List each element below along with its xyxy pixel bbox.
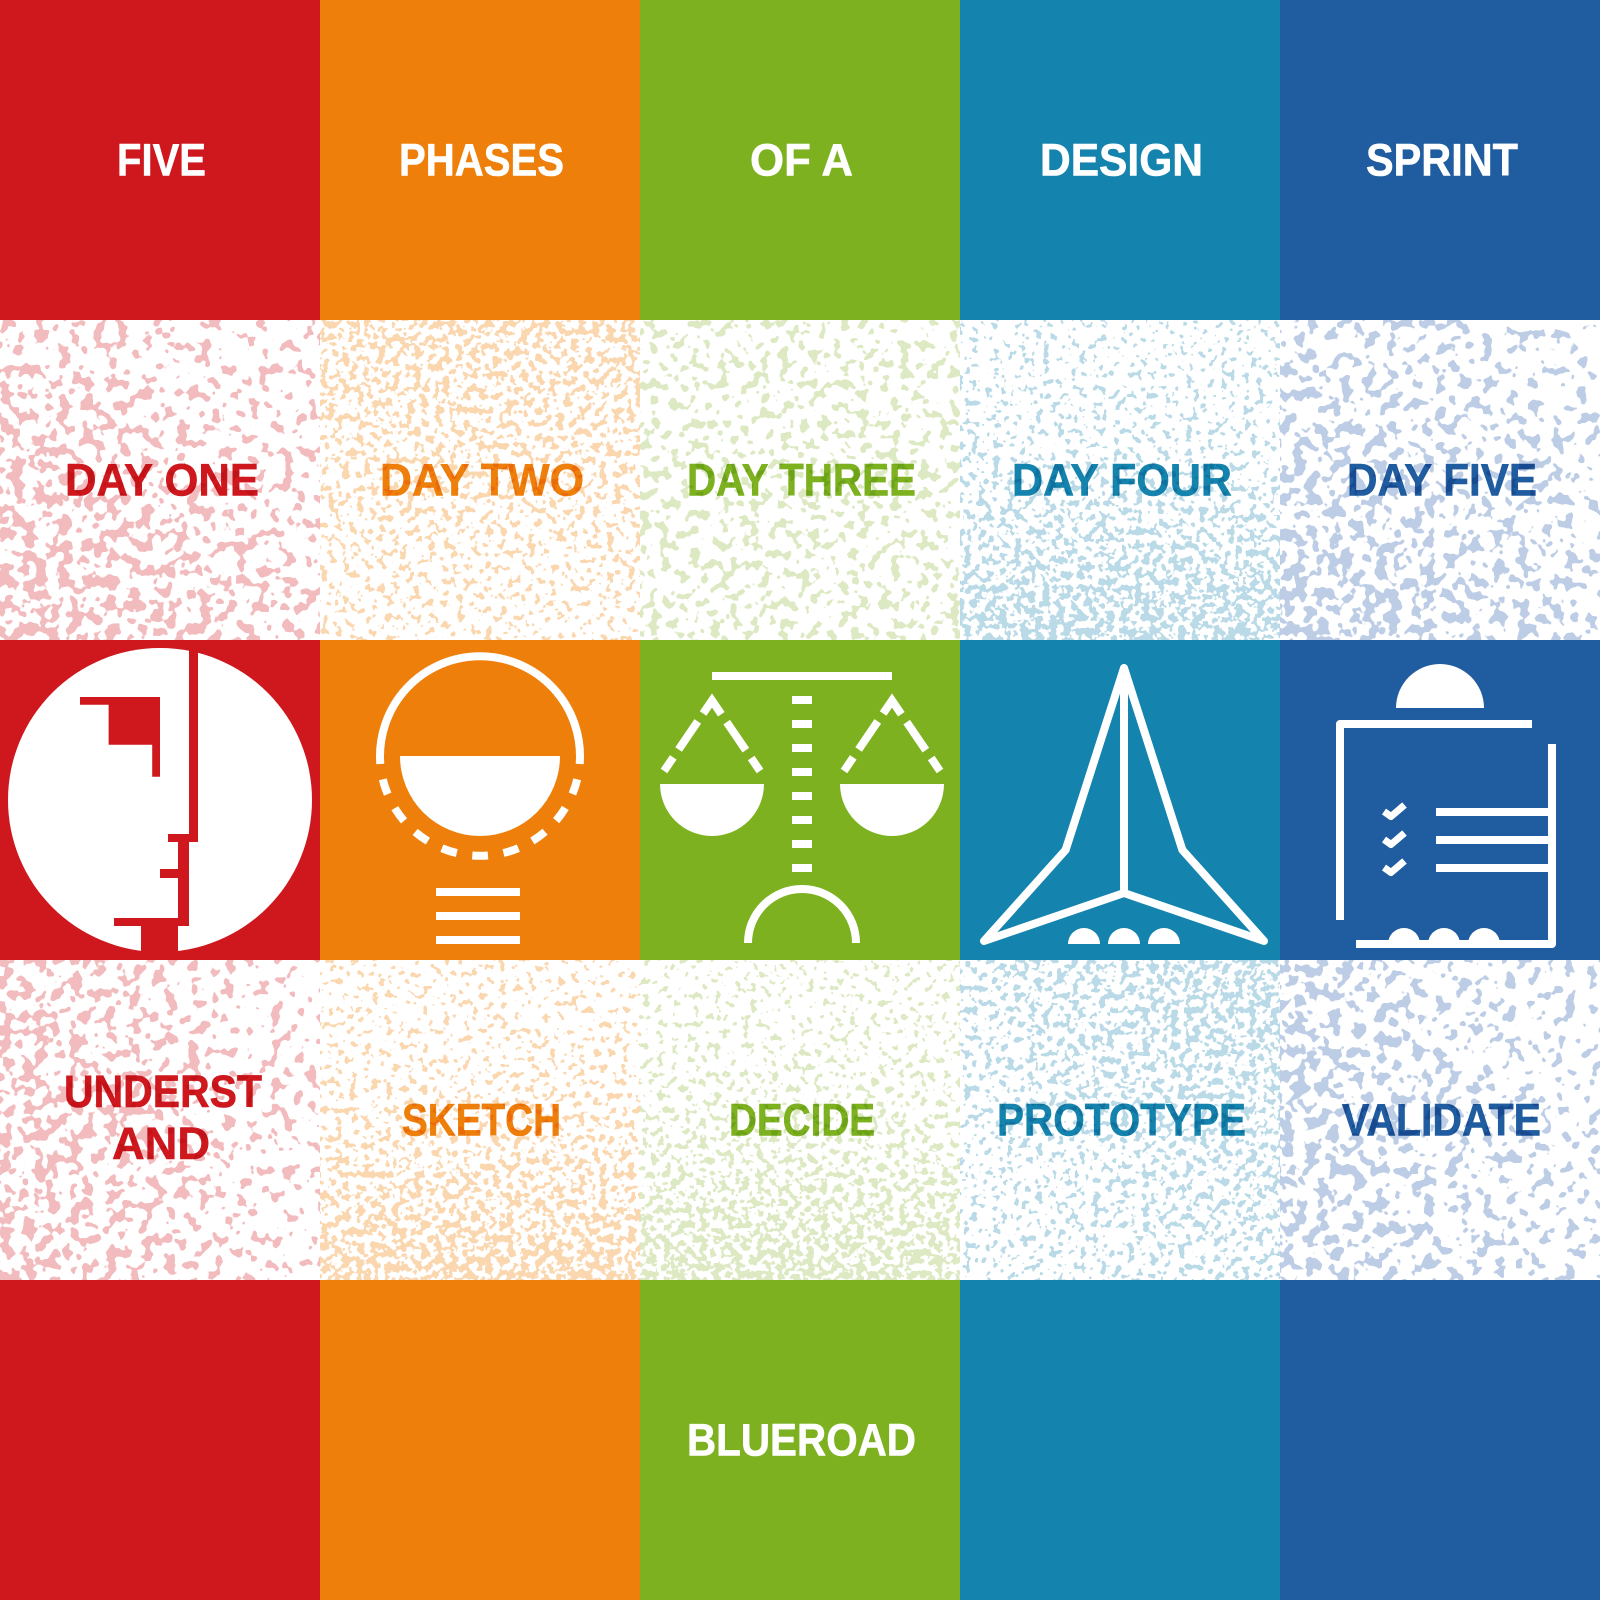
icon: light bulb on orange (320, 640, 640, 960)
footer tile: blue (1280, 1280, 1600, 1600)
title tile: DESIGN (960, 0, 1280, 320)
day labels row (0, 320, 1600, 640)
icon: bauhaus profile head on red (0, 640, 320, 960)
footer tile: red (0, 1280, 320, 1600)
phase tile: PROTOTYPE: PROTOTYPE (997, 1094, 1246, 1146)
icons row (0, 640, 1600, 960)
phase tile: DECIDE: DECIDE (729, 1094, 875, 1146)
icon: folded paper plane on teal (960, 640, 1280, 960)
day tile: DAY FIVE (1280, 320, 1600, 640)
title tile: FIVE: FIVE (117, 134, 206, 186)
title tile: FIVE (0, 0, 320, 320)
phase labels row (0, 960, 1600, 1280)
title tile: DESIGN: DESIGN (1040, 134, 1203, 186)
footer tile: BLUEROAD credit: BLUEROAD (687, 1414, 916, 1466)
footer tile: teal (960, 1280, 1280, 1600)
title tile: SPRINT (1280, 0, 1600, 320)
title tile: PHASES (320, 0, 640, 320)
phase tile: DECIDE (640, 960, 960, 1280)
phase tile: PROTOTYPE (960, 960, 1280, 1280)
title tile: PHASES: PHASES (399, 134, 564, 186)
phase tile: SKETCH (320, 960, 640, 1280)
phase tile: VALIDATE: VALIDATE (1342, 1094, 1541, 1146)
title tile: OF A: OF A (750, 134, 853, 186)
title tile: OF A (640, 0, 960, 320)
icon: balance scales on green (640, 640, 960, 960)
title row (0, 0, 1600, 320)
phase tile: SKETCH: SKETCH (402, 1094, 561, 1146)
icon: clipboard checklist on blue (1280, 640, 1600, 960)
day tile: DAY THREE (640, 320, 960, 640)
phase tile: VALIDATE (1280, 960, 1600, 1280)
day tile: DAY FOUR: DAY FOUR (1012, 454, 1232, 506)
footer tile: orange (320, 1280, 640, 1600)
day tile: DAY TWO (320, 320, 640, 640)
footer tile: BLUEROAD credit (640, 1280, 960, 1600)
day tile: DAY THREE: DAY THREE (687, 454, 916, 506)
footer row (0, 1280, 1600, 1600)
day tile: DAY ONE: DAY ONE (65, 454, 259, 506)
day tile: DAY ONE (0, 320, 320, 640)
phase tile: UNDERSTAND: UNDERST (64, 1066, 262, 1117)
phase tile: UNDERSTAND (0, 960, 320, 1280)
day tile: DAY TWO: DAY TWO (380, 454, 584, 506)
day tile: DAY FIVE: DAY FIVE (1347, 454, 1537, 506)
day tile: DAY FOUR (960, 320, 1280, 640)
phase tile: UNDERSTAND: AND (112, 1118, 210, 1169)
title tile: SPRINT: SPRINT (1366, 134, 1518, 186)
